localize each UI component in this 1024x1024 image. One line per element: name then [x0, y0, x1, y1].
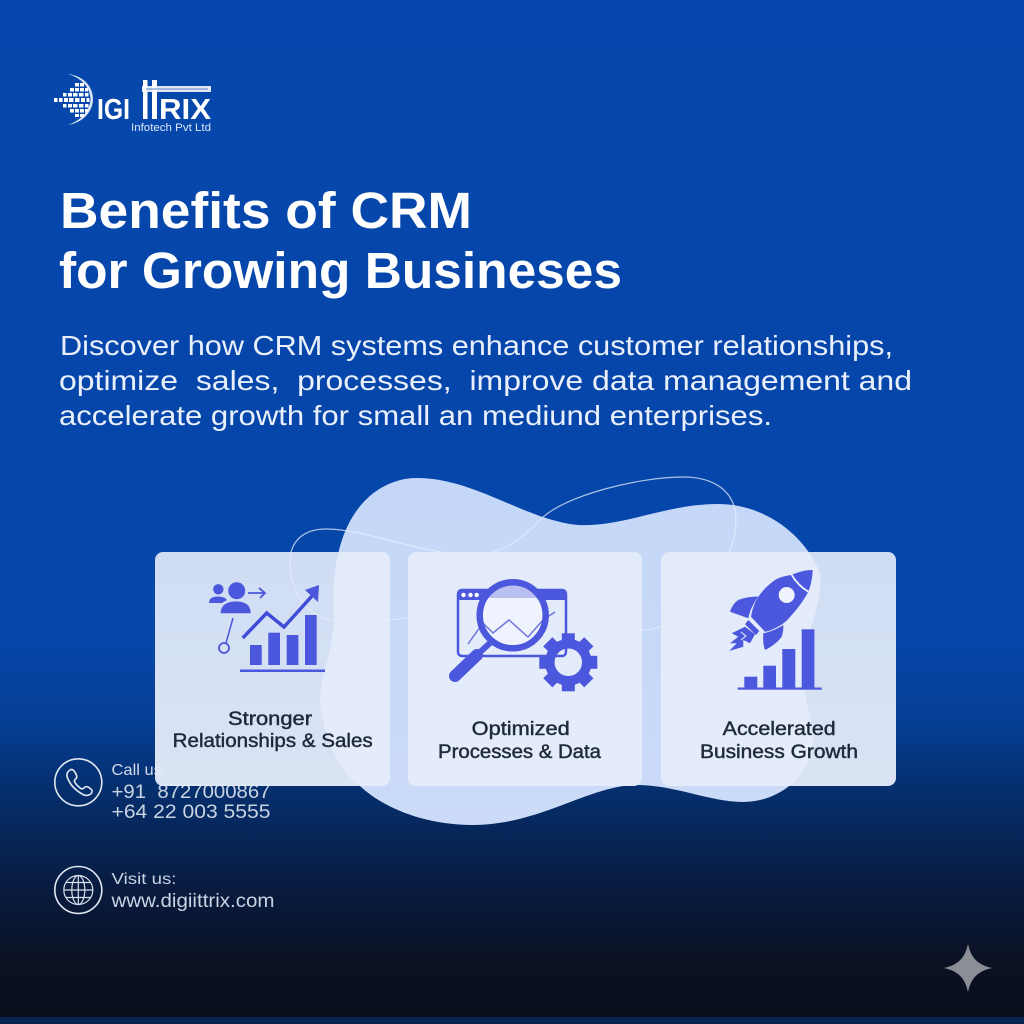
label: Optimized: [472, 719, 570, 740]
label: Relationships & Sales: [173, 731, 373, 752]
logo: Digiittrix: Infotech Pvt Ltd: [131, 122, 211, 134]
label: [173, 709, 373, 752]
panel: accelerated business growth: [661, 552, 896, 786]
label: [700, 719, 858, 763]
decorative loop line: [290, 477, 736, 630]
blob backdrop: [320, 478, 821, 825]
label: Stronger: [228, 709, 313, 730]
logo: Digiittrix: RIX: [159, 94, 212, 126]
label: Accelerated: [723, 719, 836, 740]
description: optimize sales, processes, improve data management and: [59, 365, 912, 396]
title: for Growing Busineses: [59, 242, 622, 299]
label: Business Growth: [700, 742, 858, 763]
logo: Digiittrix: [54, 74, 212, 134]
icon: sparkle star: [944, 944, 992, 992]
label: [438, 719, 601, 763]
icon: rocket with bars: [729, 570, 822, 690]
description: accelerate growth for small an mediund enterprises.: [59, 400, 772, 431]
contact: call us: Call us:: [112, 762, 166, 779]
title: Benefits of CRM: [60, 182, 472, 239]
logo: Digiittrix: IGI: [97, 94, 130, 126]
contact: call us: +64 22 003 5555: [112, 802, 270, 823]
contact: call us: +91 8727000867: [112, 782, 270, 803]
icon: people and rising sales chart: [209, 582, 325, 672]
contact: visit us: www.digiittrix.com: [110, 891, 275, 912]
label: Processes & Data: [438, 742, 601, 763]
icon: magnifier over chart with gear: [455, 582, 597, 691]
panel: optimized processes and data: [408, 552, 642, 786]
panel: stronger relationships and sales: [155, 552, 390, 786]
description: Discover how CRM systems enhance customer relationships,: [60, 330, 893, 361]
contact: visit us: [55, 866, 274, 914]
contact: visit us: Visit us:: [112, 871, 176, 888]
description: [59, 330, 912, 431]
contact: call us: [55, 759, 270, 823]
title: [59, 182, 622, 299]
